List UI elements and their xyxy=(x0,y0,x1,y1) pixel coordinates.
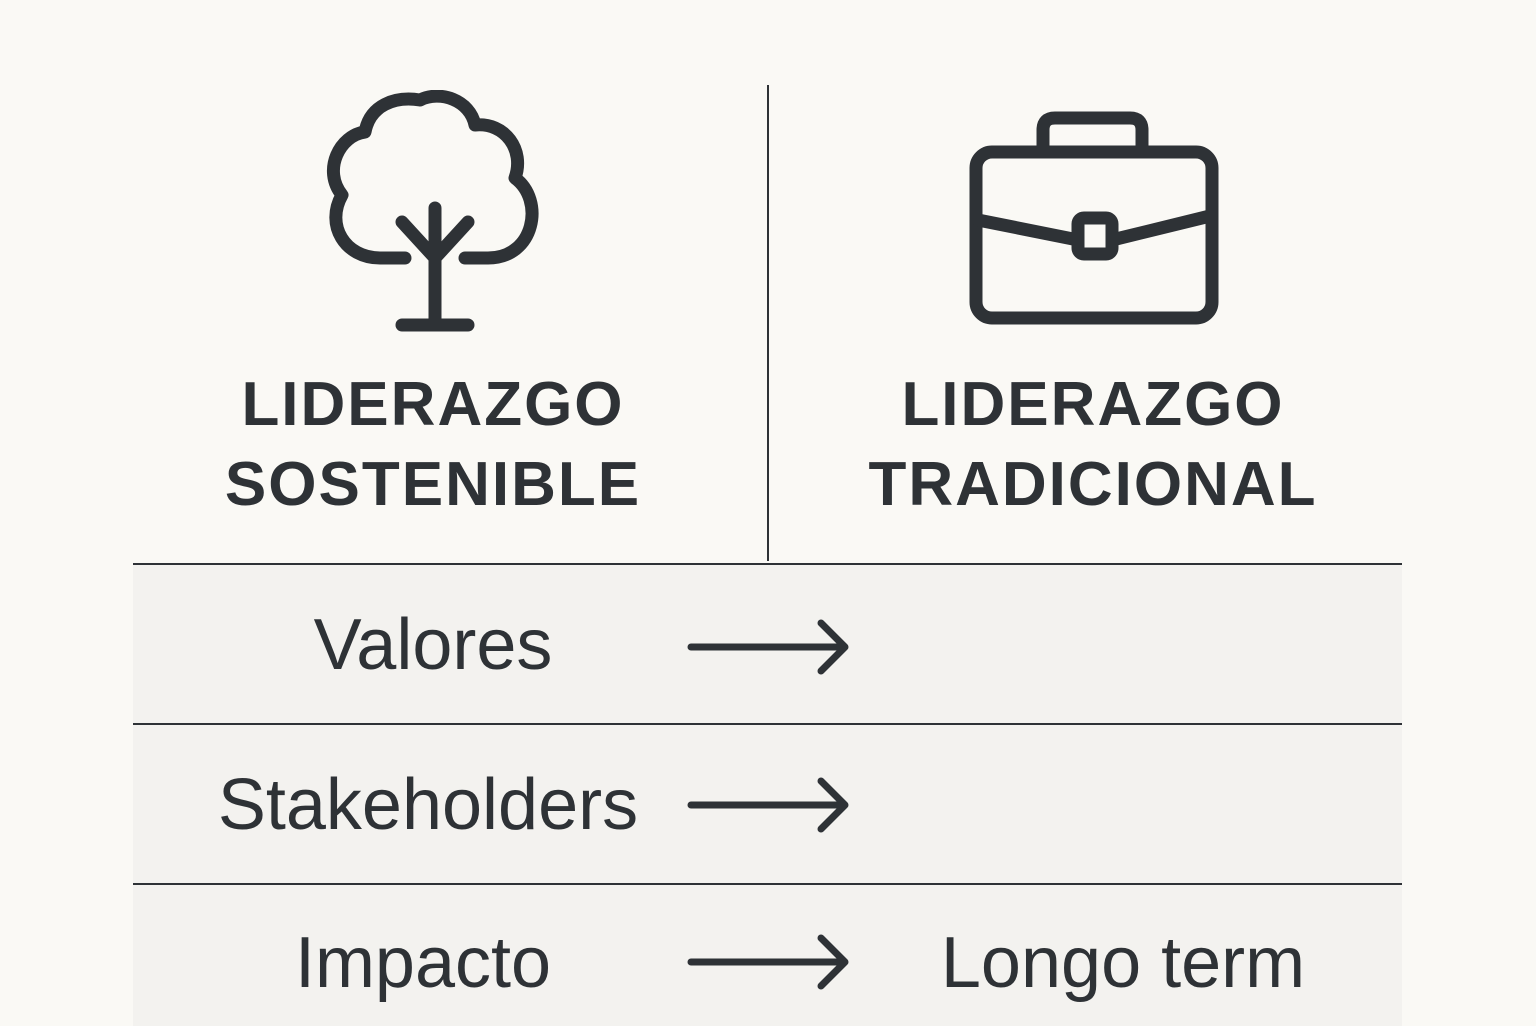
row: impacto xyxy=(133,883,1402,1026)
divider xyxy=(767,85,769,561)
title: sustainable: LIDERAZGO xyxy=(241,370,625,439)
title: sustainable xyxy=(225,370,641,519)
row: impacto: Longo term xyxy=(941,923,1305,1003)
row: stakeholders xyxy=(133,723,1402,885)
row: valores xyxy=(133,563,1402,725)
row: stakeholders: Stakeholders xyxy=(218,765,638,845)
row: valores: Valores xyxy=(314,605,552,685)
title: traditional xyxy=(868,370,1318,519)
title: traditional: TRADICIONAL xyxy=(868,450,1318,519)
title: traditional: LIDERAZGO xyxy=(901,370,1285,439)
icon: briefcase xyxy=(970,112,1218,324)
title: sustainable: SOSTENIBLE xyxy=(225,450,641,519)
row: impacto: Impacto xyxy=(295,923,551,1003)
icon: tree xyxy=(326,90,539,332)
